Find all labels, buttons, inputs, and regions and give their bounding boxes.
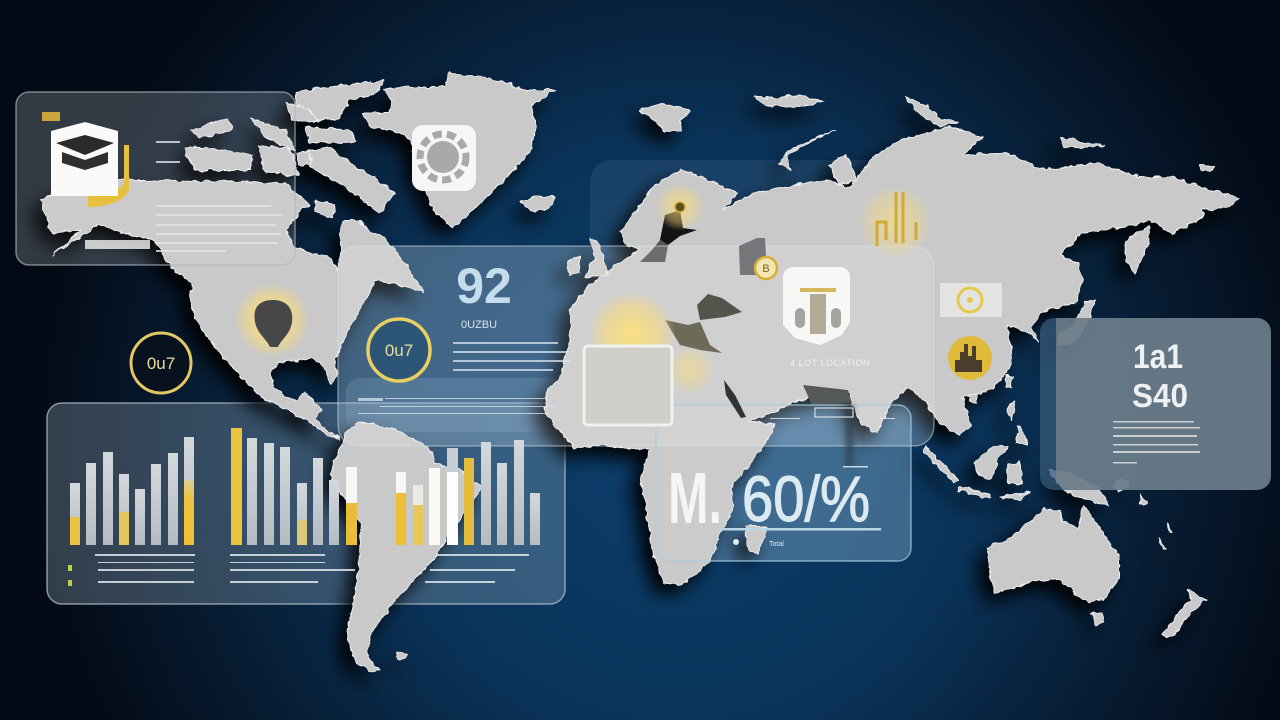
Madagascar	[746, 527, 767, 553]
bar chart: group two	[231, 428, 357, 545]
icon: column shield	[783, 267, 850, 345]
North and Central America	[41, 180, 424, 438]
icon: ring tile	[940, 283, 1002, 317]
seas seen through the central card	[665, 294, 854, 467]
Falkland island	[395, 652, 407, 660]
percentage rule and caption	[720, 466, 881, 548]
inland seas	[640, 210, 852, 405]
bar chart: group one	[70, 437, 194, 545]
panel: left top card tint	[16, 92, 295, 265]
text lines: right card	[1113, 421, 1200, 464]
icon: gear tile	[412, 125, 476, 191]
glass sheen: large central card	[338, 246, 934, 446]
icon: gold ring left	[131, 333, 191, 393]
stat: M. 60/%: M.	[668, 459, 722, 539]
icon: gold ring centre: 0u7	[385, 341, 413, 360]
glass sheen: left top card	[16, 92, 295, 265]
Arctic Canada islands	[184, 80, 394, 218]
stat: 92: 92	[456, 258, 512, 314]
world map	[41, 73, 1240, 672]
icon: Nordic marker	[656, 183, 704, 231]
South America	[331, 422, 482, 672]
glass sheen: percentage card	[656, 405, 911, 561]
stat caption: 0UZBU	[461, 319, 497, 331]
Australia	[987, 505, 1120, 603]
icon: glowing balloon marker	[234, 282, 310, 358]
icon: grey tile with coin: B	[762, 263, 770, 275]
icon: blank tile with glow	[584, 291, 714, 425]
icon: gold ring centre	[368, 319, 430, 381]
label tag	[42, 112, 60, 121]
text: under shield: 4 LOT LOCATION	[790, 358, 870, 368]
Southeast Asian islands	[924, 376, 1172, 548]
text lines: small data strip	[770, 408, 895, 419]
panel: right stats card	[1040, 318, 1271, 490]
text lines: left top card	[85, 141, 283, 252]
panel: large central card tint	[338, 246, 934, 446]
chart legend and captions	[68, 554, 529, 586]
icon: graduation cap box	[51, 122, 129, 207]
panel: percentage card tint	[656, 405, 911, 561]
text lines: centre card	[358, 342, 571, 414]
Tasmania and New Zealand	[1092, 588, 1207, 637]
Eurasia and Africa	[545, 127, 1240, 585]
icon: grey tile with coin	[739, 238, 777, 279]
bar chart: group three	[396, 440, 540, 545]
Arctic Eurasia islands	[640, 95, 1215, 185]
icon: gold ring left: 0u7	[147, 354, 175, 373]
Iceland	[520, 197, 555, 212]
percentage rule and caption: Total	[769, 541, 784, 548]
British Isles	[567, 238, 608, 277]
Greenland	[363, 73, 555, 228]
stat: S40: S40	[1132, 377, 1188, 414]
panel: bar charts glass card	[47, 403, 565, 604]
panel: lower left overlay tint	[346, 378, 596, 432]
stat: 1a1: 1a1	[1133, 338, 1183, 376]
stat: M. 60/%	[668, 459, 870, 539]
panel: faint top card tint	[590, 160, 902, 260]
Sakhalin and Japan	[1058, 226, 1150, 345]
icon: glowing bars marker	[858, 185, 932, 259]
icon: skyline badge	[948, 336, 992, 380]
stat: M. 60/%: 60/%	[742, 463, 870, 535]
